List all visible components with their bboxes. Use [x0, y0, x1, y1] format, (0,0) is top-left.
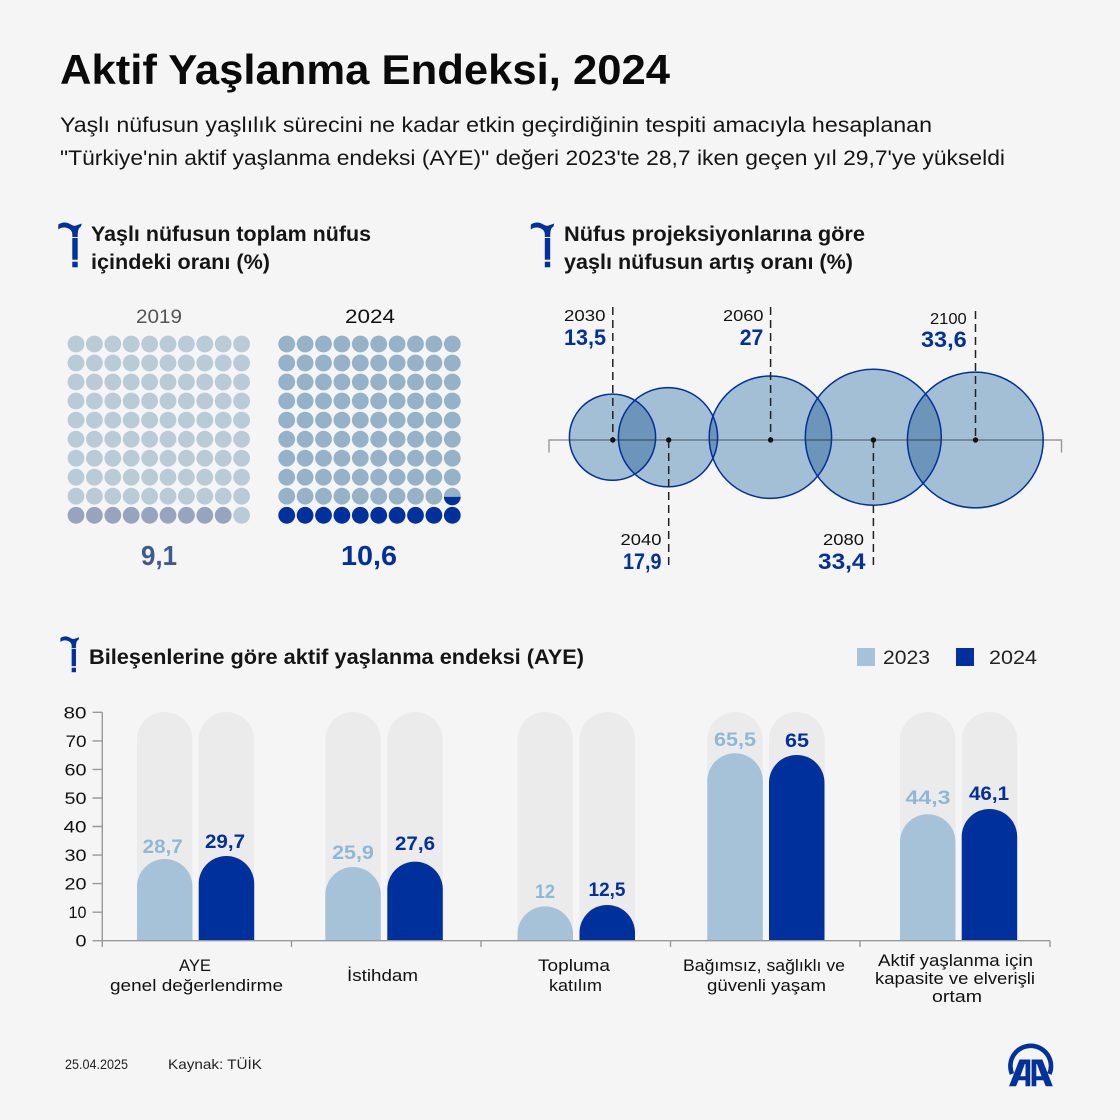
callout: 2040: 2040 [620, 532, 662, 549]
category: Topluma katılım: katılım [549, 976, 602, 995]
y axis labels: 10 [68, 903, 86, 922]
callout: 2080: 33,4 [818, 549, 866, 574]
callout: 2030: 13,5 [564, 325, 606, 350]
callout: 2060: 27 [740, 325, 763, 350]
callout: 2080 [818, 532, 866, 574]
bar values: 2024: 29,7 [205, 832, 245, 853]
y axis labels: 60 [64, 760, 86, 780]
bar values: 2024: 46,1 [969, 784, 1009, 805]
icon: AA logo [1009, 1046, 1053, 1086]
category: Bağımsız, sağlıklı ve güvenli yaşam: güvenli yaşam [707, 976, 826, 995]
y axis labels: 0 [76, 932, 86, 950]
panel: index by components [60, 636, 1050, 1006]
footer: date and source: Kaynak: TÜİK [168, 1055, 263, 1072]
legend [857, 648, 1037, 669]
bars: 2024 [199, 755, 1017, 941]
subtitle [60, 114, 1005, 170]
callout: 2060: 2060 [723, 308, 764, 325]
category: AYE genel değerlendirme: genel değerlendirme [110, 976, 283, 995]
icon: cane [60, 636, 79, 672]
value: 10,6: 10,6 [341, 540, 397, 571]
bar values: 2023: 65,5 [714, 730, 756, 751]
category: Topluma katılım [538, 956, 611, 995]
y axis labels: 50 [64, 789, 86, 808]
footer: date and source: 25.04.2025 [65, 1056, 128, 1072]
callout: 2040 [620, 532, 662, 574]
subtitle: "Türkiye'nin aktif yaşlanma endeksi (AYE)" değeri 2023'te 28,7 iken geçen yıl 29,7'ye yükseldi [60, 147, 1005, 170]
footer: date and source [65, 1055, 263, 1072]
y axis labels: 20 [64, 874, 86, 894]
heading: components: Bileşenlerine göre aktif yaşlanma endeksi (AYE) [89, 646, 584, 669]
heading: elderly share [91, 223, 371, 274]
category: Topluma katılım: Topluma [538, 956, 611, 975]
dot grid: 2024 [278, 336, 461, 524]
panel: elderly share of population [58, 222, 461, 571]
value: 9,1: 9,1 [141, 540, 177, 571]
y axis labels [64, 704, 86, 950]
category: Bağımsız, sağlıklı ve güvenli yaşam [683, 956, 845, 995]
bar values: 2024: 27,6 [395, 834, 435, 855]
bar values: 2024: 65 [785, 731, 809, 752]
heading: projections [564, 223, 865, 274]
callout: 2030: 2030 [564, 308, 606, 325]
bar values: 2023: 28,7 [143, 837, 183, 858]
legend: 2024 [989, 648, 1037, 669]
heading: projections: yaşlı nüfusun artış oranı (%) [564, 251, 853, 274]
subtitle: Yaşlı nüfusun yaşlılık sürecini ne kadar etkin geçirdiğinin tespiti amacıyla hesaplanan [60, 114, 932, 137]
callout: 2040: 17,9 [623, 549, 662, 574]
category: Bağımsız, sağlıklı ve güvenli yaşam: Bağımsız, sağlıklı ve [683, 956, 845, 975]
category: İstihdam: İstihdam [347, 966, 418, 985]
axes [92, 712, 1050, 947]
category: Aktif yaşlanma için kapasite ve elverişli ortam [875, 951, 1035, 1006]
callout: 2060 [723, 308, 764, 350]
panel: projected elderly share [531, 222, 1062, 574]
category: AYE genel değerlendirme: AYE [179, 956, 211, 975]
bar values: 2024 [205, 731, 1009, 901]
title: Aktif Yaşlanma Endeksi, 2024 [60, 46, 671, 93]
category: AYE genel değerlendirme [110, 956, 283, 995]
callout: 2100 [921, 311, 967, 352]
y axis labels: 80 [64, 704, 86, 722]
y axis labels: 70 [66, 732, 86, 751]
bar track backgrounds [137, 712, 1017, 941]
category: Aktif yaşlanma için kapasite ve elverişli ortam: kapasite ve elverişli [875, 969, 1035, 988]
heading: elderly share: içindeki oranı (%) [91, 251, 270, 274]
callout: 2100: 2100 [930, 311, 967, 328]
heading: projections: Nüfus projeksiyonlarına göre [564, 223, 865, 246]
bar values: 2023: 25,9 [332, 843, 374, 864]
bar values: 2024: 12,5 [588, 880, 626, 901]
bar values: 2023: 44,3 [906, 788, 950, 809]
legend: 2023 [883, 648, 930, 669]
icon: cane [58, 222, 82, 267]
heading: elderly share: Yaşlı nüfusun toplam nüfus [91, 223, 371, 246]
category: Aktif yaşlanma için kapasite ve elverişli ortam: ortam [932, 987, 982, 1006]
bubble timeline [549, 307, 1062, 570]
y axis labels: 30 [64, 846, 86, 865]
callout: 2100: 33,6 [921, 327, 967, 352]
category: Aktif yaşlanma için kapasite ve elverişli ortam: Aktif yaşlanma için [878, 951, 1033, 970]
bars: 2023 [137, 753, 956, 941]
bar values: 2023: 12 [535, 882, 555, 903]
y axis labels: 40 [64, 818, 86, 836]
dot grid: 2019 [68, 336, 250, 524]
callout: 2080: 2080 [823, 532, 864, 549]
callout: 2030 [564, 308, 606, 350]
label: 2024: 2024 [345, 307, 395, 328]
icon: cane [531, 222, 554, 267]
bar values: 2023 [143, 730, 950, 903]
label: 2019: 2019 [136, 307, 182, 328]
